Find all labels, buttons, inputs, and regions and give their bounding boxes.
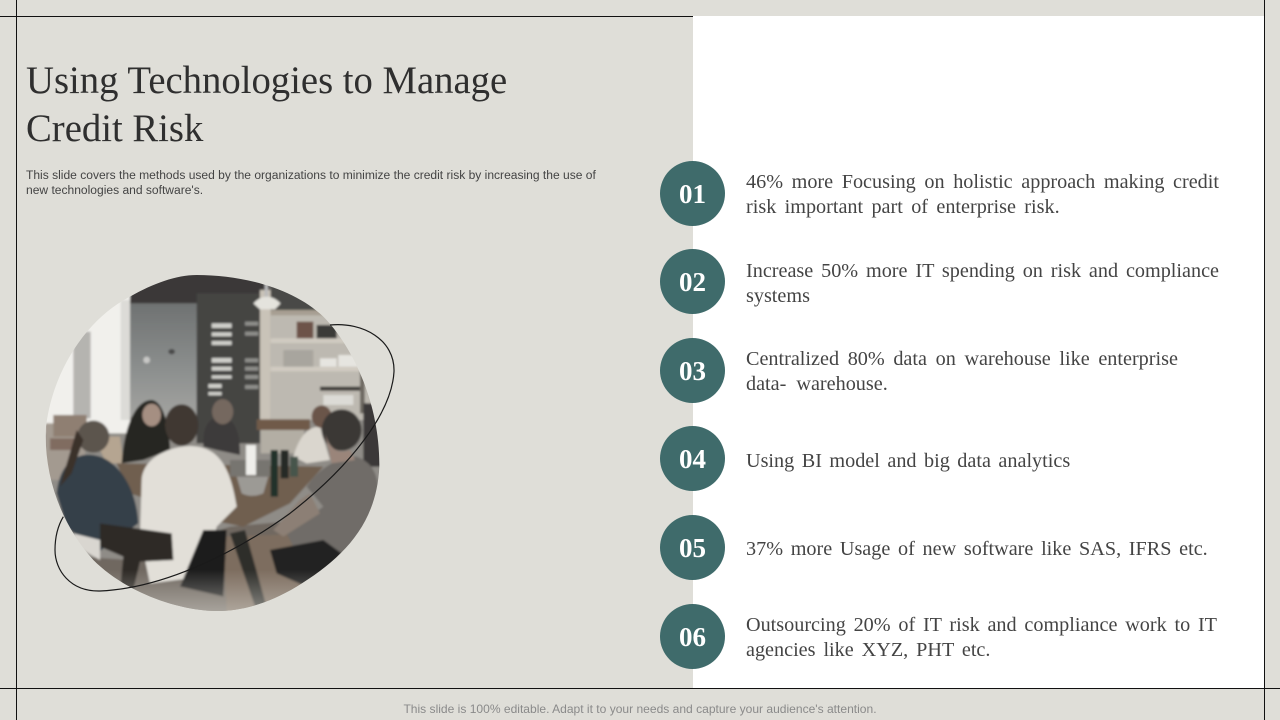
background people <box>122 400 170 463</box>
orbit line <box>55 325 394 591</box>
item 03 number: 03 <box>679 356 706 386</box>
item 02 text <box>746 260 1219 307</box>
item 05 text: 37% more Usage of new software like SAS, IFRS etc. <box>746 538 1208 560</box>
sofa and wall <box>45 423 85 480</box>
table and floor <box>90 522 338 611</box>
item 06 number <box>660 604 725 669</box>
item 01 text: 46% more Focusing on holistic approach making credit <box>746 171 1219 193</box>
description <box>26 168 596 197</box>
table items <box>237 477 268 496</box>
item 04 text: Using BI model and big data analytics <box>746 450 1070 472</box>
item 02 text: systems <box>746 285 810 307</box>
item 03 text: Centralized 80% data on warehouse like enterprise <box>746 348 1178 370</box>
item 06 text: Outsourcing 20% of IT risk and compliance work to IT <box>746 614 1217 636</box>
title <box>26 60 507 150</box>
item 04 number: 04 <box>679 444 706 474</box>
item 03 number <box>660 338 725 403</box>
item 03 text <box>746 348 1178 395</box>
footer note: This slide is 100% editable. Adapt it to your needs and capture your audience's attention. <box>403 702 877 716</box>
item 05 number <box>660 515 725 580</box>
item 06 number: 06 <box>679 622 706 652</box>
man in white shirt <box>140 446 237 583</box>
white content panel <box>693 16 1264 688</box>
item 05 number: 05 <box>679 533 706 563</box>
woman at left <box>57 455 138 553</box>
item 01 text <box>746 171 1219 218</box>
description: new technologies and software's. <box>26 183 203 197</box>
item 02 text: Increase 50% more IT spending on risk and compliance <box>746 260 1219 282</box>
man in cap <box>288 456 378 546</box>
item 01 number: 01 <box>679 179 706 209</box>
chairs <box>100 523 173 590</box>
item 01 text: risk important part of enterprise risk. <box>746 196 1060 218</box>
item 03 text: data- warehouse. <box>746 373 888 395</box>
item 06 text <box>746 614 1217 661</box>
item 04 number <box>660 426 725 491</box>
item 02 number <box>660 249 725 314</box>
room backdrop <box>46 286 380 561</box>
item 06 text: agencies like XYZ, PHT etc. <box>746 639 990 661</box>
title: Credit Risk <box>26 108 203 150</box>
title: Using Technologies to Manage <box>26 60 507 102</box>
photo: team meeting around a table in a blob mask with orbit line <box>46 275 395 611</box>
item 02 number: 02 <box>679 267 706 297</box>
item 01 number <box>660 161 725 226</box>
description: This slide covers the methods used by the organizations to minimize the credit risk by increasing the use of <box>26 168 596 182</box>
